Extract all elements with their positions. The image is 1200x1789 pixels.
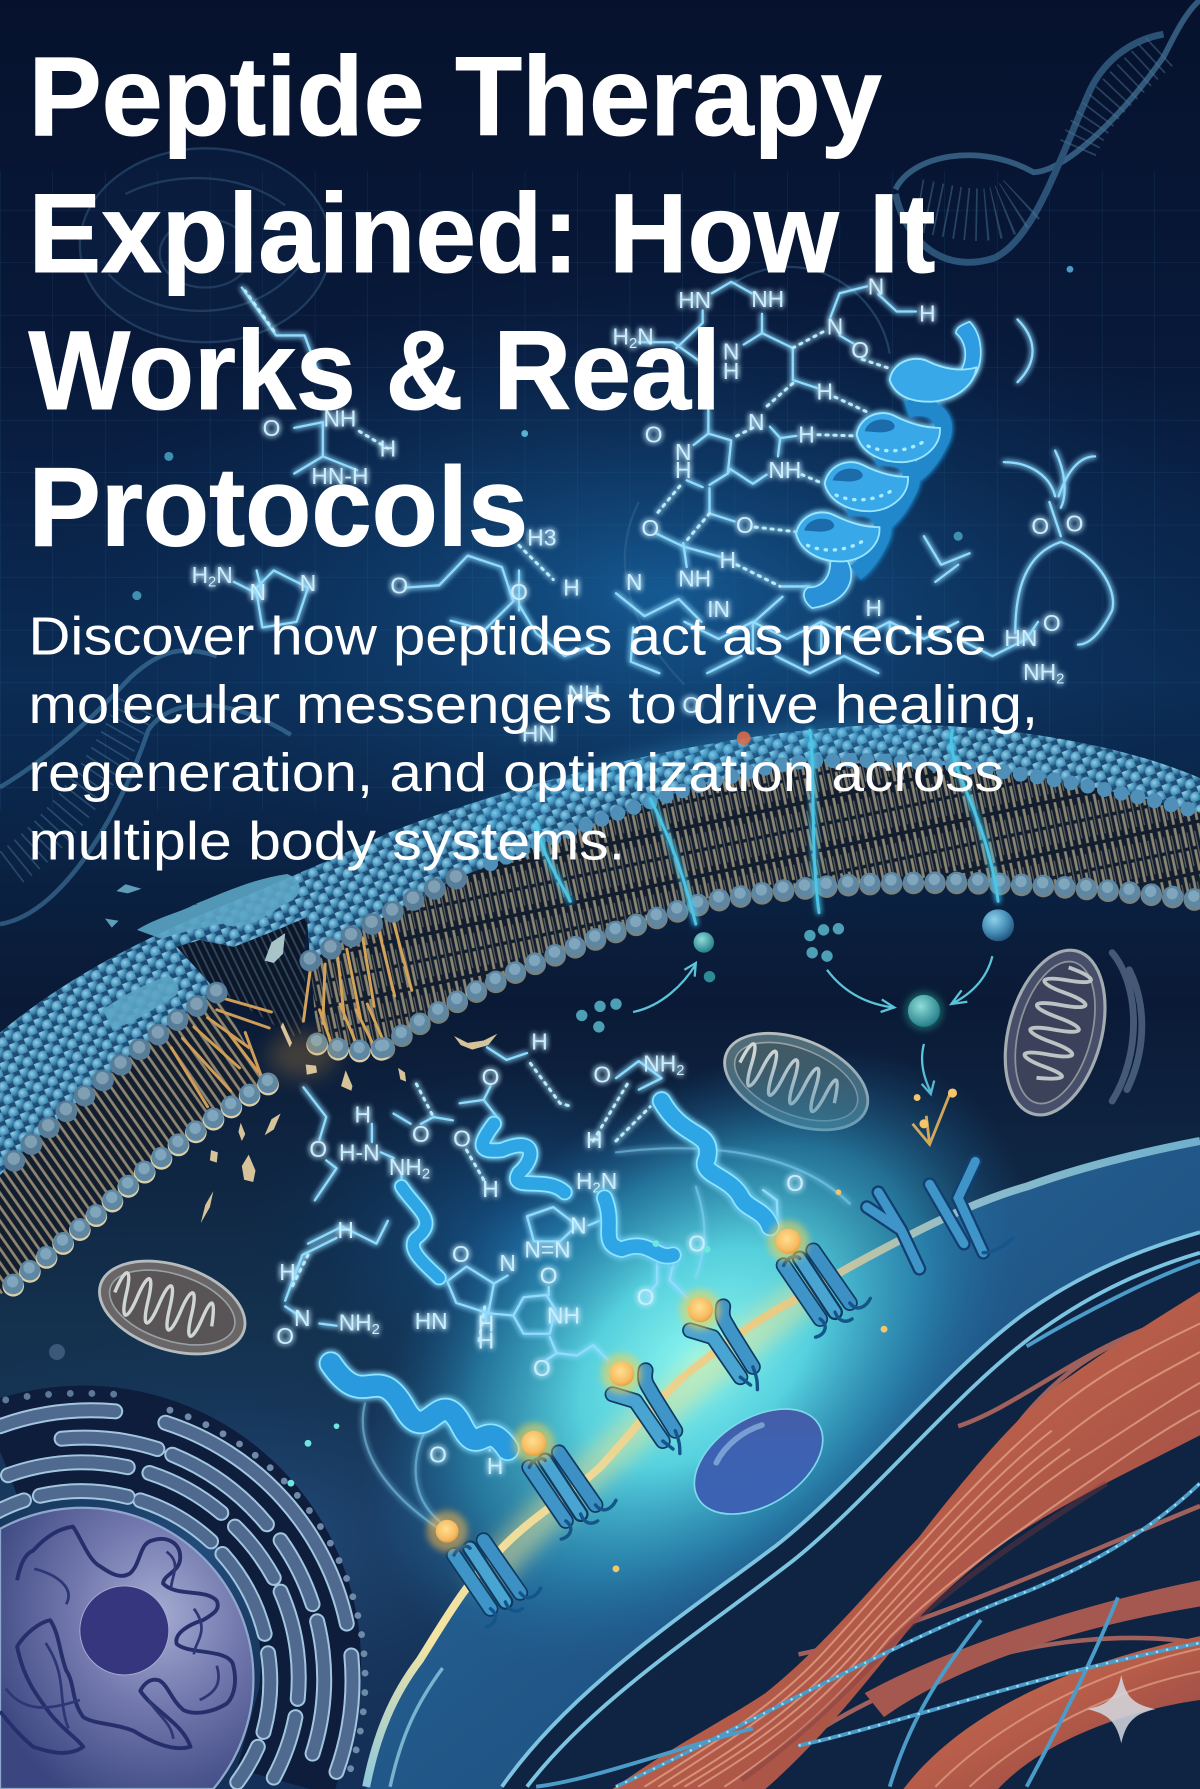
cell nucleus oval	[676, 1387, 842, 1536]
ER body	[0, 1410, 352, 1782]
lower beads highlight	[0, 879, 1199, 1293]
lower molecular structures: O	[540, 1263, 558, 1289]
cell membrane bilayer	[0, 724, 1200, 1297]
upper molecular structures: O	[263, 415, 280, 441]
upper molecular structures: O	[1031, 513, 1049, 539]
upper molecular structures: O	[390, 572, 408, 598]
receptor 7, Y-shaped	[930, 1161, 1013, 1253]
lower molecular structures: NH	[547, 1302, 580, 1328]
upper molecular structures: HN	[522, 721, 555, 747]
ER light rim	[0, 1410, 352, 1782]
lower molecular structures: HN	[415, 1308, 448, 1334]
lower molecular structures	[276, 1029, 850, 1529]
title: Protocols	[29, 444, 528, 570]
nerve fibre dots	[616, 1483, 1200, 1787]
helix turn 1	[890, 359, 976, 402]
upper molecular structures: H	[816, 378, 833, 404]
subtitle: multiple body systems.	[29, 812, 625, 872]
helix turn 1 upper curl	[956, 322, 981, 377]
receptor 1	[454, 1540, 541, 1627]
lower molecular structures: 2	[592, 1180, 601, 1196]
chromatin	[0, 1527, 235, 1753]
upper molecular structures: 2	[629, 336, 637, 352]
nucleus body	[0, 1508, 253, 1789]
upper molecular structures: N	[723, 338, 739, 364]
receptor 5	[784, 1250, 870, 1337]
title: Works & Real	[29, 307, 721, 433]
ribosome dots, upper	[6, 1393, 114, 1400]
title	[29, 33, 935, 570]
lower right bundle	[903, 1636, 1200, 1789]
background glow: upper molecule field	[23, 251, 1200, 936]
faint cell outline, upper left	[80, 148, 890, 685]
background glow: lower left	[0, 1312, 684, 1768]
outer cell membrane band	[366, 1141, 1200, 1787]
upper molecular structures: IN	[707, 596, 730, 622]
lower molecular structures: 2	[422, 1167, 430, 1183]
lower molecular structures: NH	[643, 1050, 676, 1076]
sparkle watermark	[1087, 1675, 1156, 1743]
upper molecular structures: N	[300, 570, 316, 596]
lower molecular structures: 2	[676, 1063, 684, 1079]
front upper beads	[0, 871, 477, 1175]
golden tails beside rupture, left	[171, 998, 271, 1107]
bead surface	[0, 724, 1200, 1175]
main bundle shadow	[741, 1483, 1106, 1780]
lower molecular structures: O	[593, 1062, 611, 1088]
channels through membrane	[536, 730, 998, 924]
lower molecular structures: O	[429, 1442, 447, 1468]
lower molecular structures: H-N	[339, 1139, 380, 1165]
yellow glow along membrane	[479, 1284, 821, 1586]
lower beads body	[0, 882, 1200, 1295]
front upper beads highlight	[0, 868, 476, 1173]
lower molecular structures: NH	[339, 1309, 372, 1335]
membrane highlight	[479, 730, 913, 821]
lower molecular structures: 2	[372, 1322, 380, 1338]
blue helix ribbons, lower	[331, 1101, 770, 1449]
lower molecular structures: N=N	[524, 1236, 571, 1262]
golden signal branch	[913, 1093, 950, 1144]
DNA helix, left	[0, 650, 291, 924]
lower molecular structures: O	[637, 1284, 654, 1310]
subtitle	[29, 606, 1038, 872]
upper molecular structures: H	[192, 562, 208, 588]
upper molecular structures: H	[723, 358, 739, 384]
torn surface fragments	[103, 874, 300, 1028]
upper molecular structures: H	[798, 422, 815, 448]
lower molecular structures: O	[452, 1241, 470, 1267]
helix tail	[804, 559, 851, 608]
lower molecular structures: O	[453, 1126, 471, 1152]
receptor 3	[613, 1370, 680, 1454]
dark tissue behind muscle	[502, 1232, 1200, 1789]
upper molecular structures: O	[682, 692, 700, 718]
lower molecular structures: O	[688, 1231, 706, 1257]
lower molecular structures: H	[478, 1328, 494, 1354]
lower molecular structures: O	[786, 1170, 804, 1196]
rupture glow	[268, 1033, 337, 1078]
upper molecular structures: N	[675, 439, 692, 465]
lower molecular structures: H	[586, 1127, 603, 1153]
upper molecular structures: H	[675, 457, 692, 483]
background glow: lower molecule field	[240, 1050, 833, 1438]
upper molecular structures: O	[736, 512, 754, 538]
front upper beads, right section	[490, 760, 1200, 864]
upper molecular structures: O	[851, 337, 869, 363]
tails layer: left section	[0, 993, 268, 1295]
helix turn 3	[825, 456, 911, 523]
lower molecular structures: H	[478, 1310, 494, 1336]
upper molecular structures: O	[510, 579, 528, 605]
upper molecular structures: H	[380, 435, 396, 461]
upper molecular structures: N	[626, 569, 642, 595]
helix ribbon, upper right	[796, 322, 981, 608]
lower molecular structures: O	[412, 1121, 430, 1147]
upper molecular structures: H	[563, 575, 580, 601]
upper molecular structures: HN	[678, 287, 711, 313]
lower bead row shadow	[0, 1045, 384, 1297]
peptide spark on membrane	[737, 731, 751, 745]
inner cell boundary	[502, 1232, 1200, 1787]
DNA helix, upper right	[895, 0, 1200, 262]
subtitle: regeneration, and optimization across	[29, 743, 1004, 803]
target cell body	[366, 1141, 1200, 1789]
bound peptide signals	[427, 1221, 809, 1552]
upper molecular structures: NH	[751, 286, 784, 312]
ER dark backing	[0, 1436, 311, 1782]
helix turn 2	[857, 407, 943, 473]
upper molecular structures: O	[1043, 610, 1061, 636]
lower bead row: tan right	[384, 883, 1200, 1049]
golden tails beside rupture, right	[303, 922, 412, 1046]
lower molecular structures: N	[570, 1212, 587, 1238]
lower molecular structures: N	[601, 1168, 617, 1194]
second cell membrane line	[390, 1668, 443, 1787]
chromatin, second strand	[6, 1552, 219, 1739]
lower molecular structures: O	[533, 1355, 551, 1381]
mitochondrion, upper right	[988, 939, 1122, 1126]
cyan glow	[242, 920, 1150, 1789]
lower molecular structures: N	[499, 1250, 516, 1276]
receptor 6, Y-shaped	[867, 1192, 919, 1269]
upper molecular structures: N	[868, 273, 884, 299]
upper molecular structures: H	[866, 595, 882, 621]
lower molecular structures: O	[276, 1323, 294, 1349]
upper molecular structures: O	[1066, 511, 1083, 537]
title: Explained: How It	[29, 170, 935, 296]
upper molecular structures: NH	[678, 565, 711, 591]
membrane shards	[105, 884, 497, 1223]
upper molecular structures: N	[637, 324, 654, 350]
main bundle	[613, 1292, 1200, 1789]
upper molecular structures: NH	[768, 457, 801, 483]
glowing particles	[49, 266, 1073, 1572]
upper molecular structures: N	[827, 313, 843, 339]
upper molecular structures: N	[250, 579, 266, 605]
lower molecular structures: N	[294, 1305, 311, 1331]
lower molecular structures: H	[279, 1259, 296, 1285]
nucleolus	[80, 1586, 169, 1675]
lower molecular structures: NH	[389, 1154, 422, 1180]
ribosome dots	[170, 1410, 365, 1776]
upper molecular structures: H	[720, 547, 736, 573]
upper molecular structures: O	[645, 422, 662, 448]
upper molecular structures: 2	[208, 574, 216, 590]
upper molecular structures: O	[641, 515, 659, 541]
tails layer: main section	[310, 760, 1200, 1047]
upper molecular structures: H	[919, 301, 936, 327]
mitochondrion, center	[711, 1014, 882, 1149]
lower molecular structures: N	[487, 1430, 503, 1456]
rupture gap	[177, 917, 307, 1037]
mitochondrion, left	[88, 1244, 257, 1371]
upper molecular structures: H3	[527, 524, 556, 550]
nucleus and endoplasmic reticulum	[0, 1393, 365, 1789]
upper molecular structures: 2	[1056, 671, 1064, 687]
upper molecular structures: N	[748, 409, 765, 435]
upper molecular structures	[192, 273, 1113, 747]
helix turn 4	[796, 507, 883, 573]
signal particles and arrows	[582, 909, 1014, 1094]
upper molecular structures: NH	[323, 406, 356, 432]
receptor 2	[529, 1452, 616, 1539]
background grid	[0, 171, 1200, 810]
upper molecular structures: N	[216, 562, 233, 588]
blue nerve fibres	[536, 1261, 1200, 1787]
upper molecular structures: NH	[1023, 659, 1056, 685]
lower molecular structures: H	[531, 1029, 548, 1055]
upper molecular structures: HN-H	[311, 463, 368, 489]
upper molecular structures: HN	[1004, 625, 1037, 651]
title: Peptide Therapy	[29, 33, 882, 159]
lower molecular structures: H	[487, 1453, 503, 1479]
lower molecular structures: H	[576, 1168, 592, 1194]
upper molecular structures: H	[612, 324, 629, 350]
lower molecular structures: O	[482, 1064, 499, 1090]
subtitle: Discover how peptides act as precise	[29, 606, 987, 666]
lower bundle branch	[865, 1580, 1200, 1717]
subtitle: molecular messengers to drive healing,	[29, 675, 1038, 735]
ER beside upper right mitochondrion	[1112, 953, 1142, 1101]
lower molecular structures: O	[309, 1136, 327, 1162]
muscle fibres	[536, 1261, 1200, 1789]
main bundle striations	[644, 1323, 1200, 1787]
lower right striations	[935, 1649, 1200, 1787]
lower molecular structures: H	[337, 1217, 354, 1243]
lower molecular structures: H	[355, 1102, 371, 1128]
upper molecular structures: NH	[568, 681, 600, 707]
receptor 4	[690, 1306, 757, 1390]
cell nucleus highlight	[716, 1425, 762, 1463]
lower molecular structures: H	[482, 1176, 499, 1202]
